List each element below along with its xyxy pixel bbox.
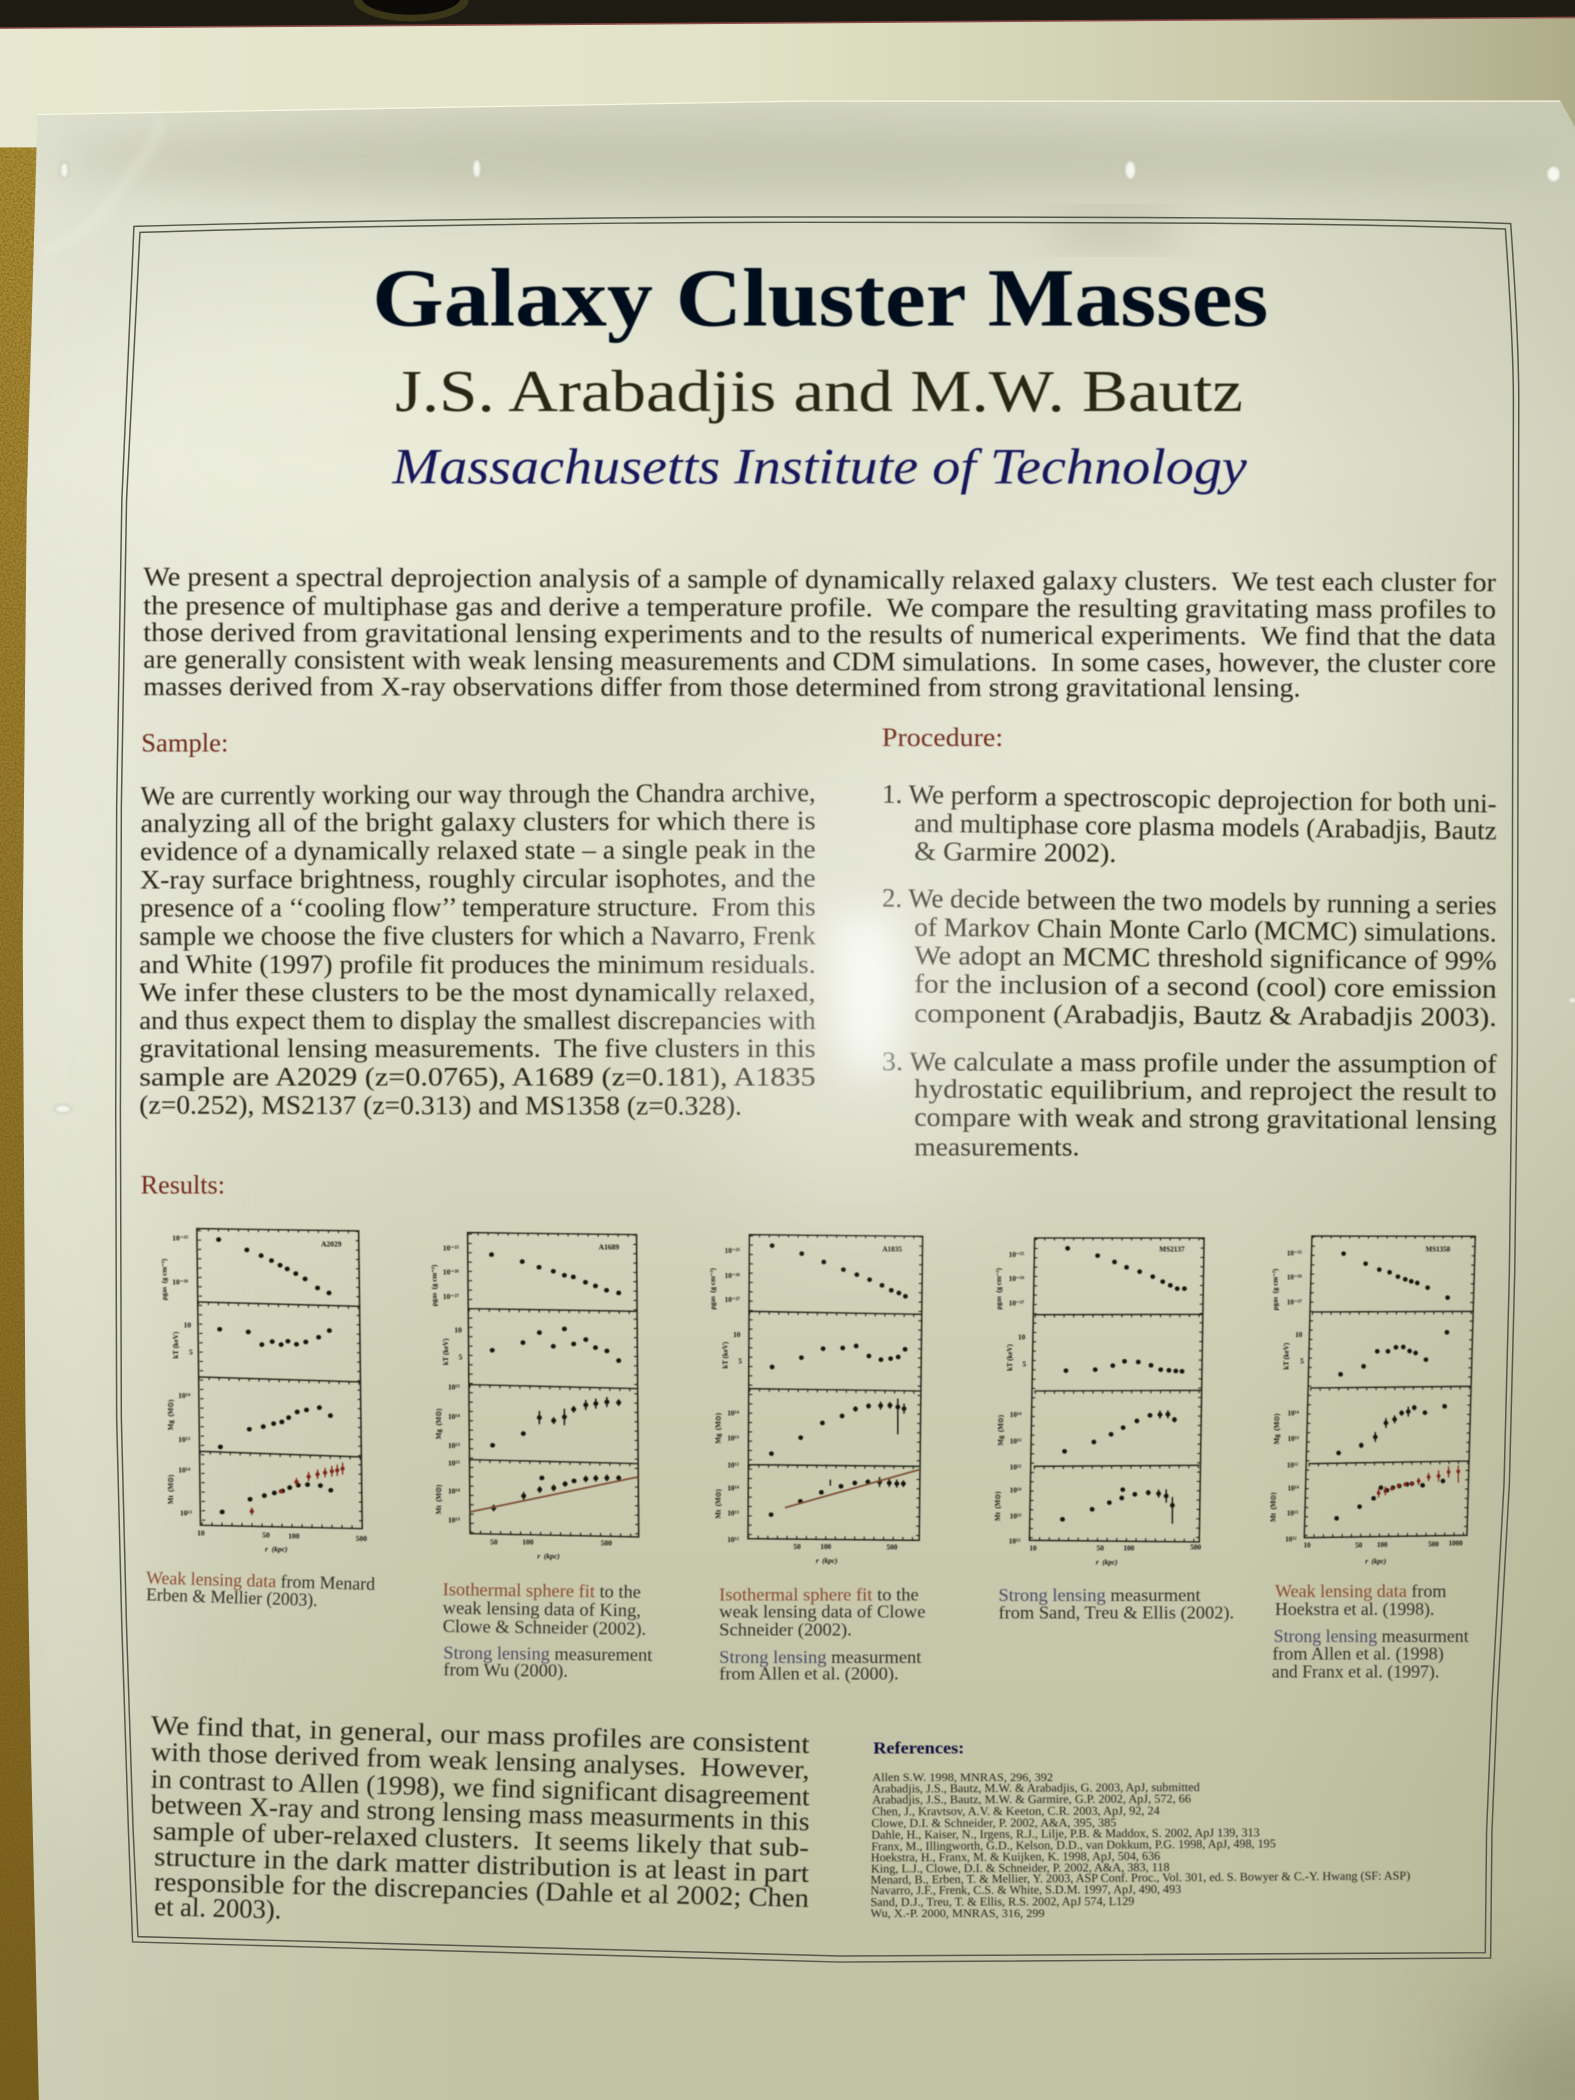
chart: MS2137: Mg (M⊙)	[997, 1414, 1005, 1446]
chart: A1835: A1835	[882, 1246, 902, 1254]
panel: sample text: sample are A2029 (z=0.0765), A1689 (z=0.181), A1835	[139, 1061, 816, 1091]
panel: procedure list: compare with weak and strong gravitational lensing	[914, 1102, 1497, 1135]
double-rule poster frame	[116, 217, 1519, 1962]
caption: MS1358: from Allen et al. (1998)	[1272, 1643, 1444, 1664]
chart: MS2137	[994, 1238, 1204, 1566]
chart: MS1358: 100	[1377, 1541, 1388, 1549]
panel: sample text: X-ray surface brightness, roughly circular isophotes, and the	[140, 863, 816, 894]
chart: A1835: kT (keV)	[721, 1341, 729, 1369]
chart: A2029: kT (keV)	[172, 1331, 180, 1359]
panel: conclusion text: structure in the dark matter distribution is at least in part	[154, 1841, 810, 1888]
chart: A1689: A1689	[599, 1244, 619, 1252]
chart: A1835: 50	[793, 1543, 801, 1551]
chart: MS2137: 10¹²	[1010, 1464, 1021, 1472]
caption: MS1358: Weak lensing data from	[1275, 1581, 1446, 1601]
panel: sample text: and thus expect them to display the smallest discrepancies with	[139, 1005, 816, 1035]
chart: A1689: Mt (M⊙)	[435, 1484, 443, 1514]
chart: MS2137: 10⁻²⁶	[1009, 1275, 1024, 1283]
panel: procedure list: component (Arabadjis, Bautz & Arabadjis 2003).	[914, 998, 1497, 1032]
panel: references list: Menard, B., Erben, T. & Mellier, Y. 2003, ASP Conf. Proc., Vol. 301, ed. S. Bowyer & C.-Y. Hwang (SF: ASP)	[870, 1868, 1410, 1887]
panel: procedure list: hydrostatic equilibrium, and reproject the result to	[914, 1074, 1497, 1107]
chart: A2029: 10⁻²⁵	[172, 1234, 189, 1242]
chart: MS2137: kT (keV)	[1006, 1343, 1014, 1371]
panel: conclusion text: in contrast to Allen (1998), we find significant disagreement	[151, 1764, 811, 1811]
chart: MS2137: 10	[1029, 1544, 1037, 1552]
chart: A1835: 10¹²	[727, 1536, 739, 1544]
chart: MS1358: 10⁻²⁶	[1287, 1274, 1302, 1282]
panel: references list: Franx, M., Illingworth, G.D., Kelson, D.D., van Dokkum, P.G. 1998, ApJ, 498, 195	[871, 1836, 1276, 1853]
chart: A1689: 10⁻²⁶	[443, 1269, 460, 1277]
chart: A2029: 10	[184, 1322, 192, 1330]
panel: conclusion text	[150, 1710, 811, 1925]
panel: references list: Wu, X.-P. 2000, MNRAS, 316, 299	[871, 1906, 1045, 1920]
chart: MS1358: 10¹⁴	[1288, 1409, 1300, 1417]
panel: procedure list: 1. We perform a spectroscopic deprojection for both uni-	[882, 779, 1497, 819]
chart: A1835: 500	[886, 1544, 898, 1552]
abstract paragraph: We present a spectral deprojection analysis of a sample of dynamically relaxed galaxy clusters. We test each cluster for	[143, 561, 1496, 597]
caption: A1689: from Wu (2000).	[443, 1659, 568, 1682]
abstract paragraph: the presence of multiphase gas and derive a temperature profile. We compare the resulting gravitating mass profiles to	[143, 590, 1496, 624]
chart: A1835: 10	[733, 1331, 741, 1339]
chart: A1689: 50	[490, 1538, 498, 1546]
panel: references list: Sand, D.J., Treu, T. & Ellis, R.S. 2002, ApJ 574, L129	[870, 1894, 1134, 1909]
chart: MS2137: 10¹⁴	[1010, 1486, 1022, 1494]
abstract paragraph: those derived from gravitational lensing experiments and to the results of numerical experiments. We find that the data	[143, 617, 1496, 651]
chart: A1689: 10⁻²⁵	[443, 1244, 460, 1252]
caption: MS1358: Strong lensing measurment	[1274, 1626, 1469, 1646]
panel: references list: Allen S.W. 1998, MNRAS, 296, 392	[872, 1770, 1053, 1784]
chart: MS1358: 50	[1355, 1542, 1363, 1550]
chart: A2029: 500	[356, 1535, 367, 1543]
panel: references list: King, L.J., Clowe, D.I. & Schneider, P. 2002, A&A, 383, 118	[871, 1860, 1170, 1876]
chart: A1689: 10¹³	[448, 1442, 461, 1450]
chart: A2029: A2029	[321, 1240, 342, 1248]
chart: MS1358: MS1358	[1426, 1245, 1451, 1253]
chart: A1689: kT (keV)	[442, 1338, 450, 1365]
caption: MS2137	[998, 1585, 1234, 1624]
panel: conclusion text: sample of uber-relaxed clusters. It seems likely that sub-	[153, 1815, 809, 1862]
dark ceiling strip	[0, 0, 1575, 28]
chart: A2029: 5	[189, 1348, 193, 1356]
panel: procedure list: for the inclusion of a second (cool) core emission	[914, 968, 1497, 1004]
panel: references list: Navarro, J.F., Frenk, C.S. & White, S.D.M. 1997, ApJ, 490, 493	[870, 1882, 1181, 1897]
chart: A1835: r (kpc)	[816, 1557, 838, 1565]
chart: A2029: r (kpc)	[265, 1546, 288, 1554]
chart: A1835: 10⁻²⁶	[725, 1272, 740, 1280]
chart: A1689: r (kpc)	[537, 1553, 560, 1561]
panel: sample text: analyzing all of the bright galaxy clusters for which there is	[141, 805, 816, 838]
panel: conclusion text: We find that, in general, our mass profiles are consistent	[150, 1710, 811, 1759]
caption: A1689: Isothermal sphere fit to the	[443, 1579, 641, 1602]
chart: MS2137: Mt (M⊙)	[994, 1491, 1002, 1521]
panel: sample text: evidence of a dynamically relaxed state – a single peak in the	[140, 834, 816, 866]
panel: conclusion text: et al. 2003).	[154, 1891, 282, 1925]
chart: A1689: 10¹⁴	[448, 1488, 461, 1496]
caption: A1835: Isothermal sphere fit to the	[719, 1584, 919, 1604]
chart: A1835: 10¹³	[727, 1510, 739, 1518]
caption: A2029	[146, 1568, 375, 1611]
caption: A2029: Weak lensing data from Menard	[146, 1568, 375, 1594]
caption: A1689: weak lensing data of King,	[443, 1598, 641, 1620]
heading: References: References:	[873, 1739, 964, 1758]
panel: conclusion text: responsible for the discrepancies (Dahle et al 2002; Chen	[154, 1866, 809, 1913]
caption: A1835: weak lensing data of Clowe	[719, 1602, 925, 1622]
caption: A1835: Schneider (2002).	[719, 1619, 852, 1640]
chart: MS2137: 10⁻²⁷	[1009, 1300, 1024, 1308]
panel: sample text: presence of a ‘‘cooling flow’’ temperature structure. From this	[140, 891, 816, 923]
abstract paragraph: masses derived from X-ray observations differ from those determined from strong gravitational lensing.	[143, 671, 1300, 703]
chart: MS2137: 10⁻²⁵	[1009, 1251, 1024, 1259]
chart: A1835: 10¹⁴	[727, 1409, 740, 1417]
panel: sample text: We infer these clusters to be the most dynamically relaxed,	[139, 977, 816, 1007]
chart: A1835: 10⁻²⁷	[725, 1296, 740, 1304]
panel: sample text	[139, 777, 816, 1121]
heading: Sample: Sample:	[141, 727, 228, 757]
chart: MS2137: 10	[1018, 1333, 1026, 1341]
chart: A1835: 10¹³	[727, 1434, 739, 1442]
chart: A2029: 10¹⁴	[178, 1392, 191, 1400]
chart: MS1358: 10¹³	[1288, 1435, 1299, 1443]
chart: A1689: ρgas (g cm⁻³)	[430, 1264, 439, 1306]
chart: MS1358: 10⁻²⁷	[1287, 1298, 1302, 1306]
chart: A1689: 10¹³	[448, 1516, 461, 1524]
chart: MS2137: 10¹³	[1010, 1438, 1021, 1446]
panel: procedure list: measurements.	[914, 1131, 1079, 1161]
heading: Results: Results:	[141, 1169, 225, 1199]
chart: A2029: 10¹⁴	[178, 1467, 191, 1475]
panel: procedure list: and multiphase core plasma models (Arabadjis, Bautz	[914, 808, 1497, 845]
chart: A1835: 10¹⁴	[727, 1484, 740, 1492]
chart: MS1358: 10¹²	[1287, 1462, 1298, 1470]
caption: A1689: Clowe & Schneider (2002).	[443, 1616, 646, 1640]
chart: MS1358: r (kpc)	[1365, 1558, 1386, 1566]
panel: references list: Arabadjis, J.S., Bautz, M.W. & Garmire, G.P. 2002, ApJ, 572, 66	[872, 1792, 1191, 1807]
panel: sample text: gravitational lensing measurements. The five clusters in this	[139, 1033, 816, 1063]
chart: A2029: ρgas (g cm⁻³)	[160, 1258, 169, 1300]
panel: procedure list: of Markov Chain Monte Carlo (MCMC) simulations.	[914, 912, 1497, 948]
chart: MS1358: 500	[1428, 1541, 1439, 1549]
chart: A1835	[709, 1235, 923, 1565]
panel: references list: Arabadjis, J.S., Bautz, M.W. & Arabadjis, G. 2003, ApJ, submitted	[872, 1780, 1200, 1796]
panel: references list: Clowe, D.I. & Schneider, P. 2002, A&A, 395, 385	[871, 1815, 1116, 1830]
chart: MS1358: Mt (M⊙)	[1270, 1492, 1278, 1522]
chart: MS1358: 5	[1300, 1358, 1304, 1366]
panel: references list: Hoekstra, H., Franx, M. & Kuijken, K. 1998, ApJ, 504, 636	[871, 1849, 1160, 1864]
chart: A2029: Mg (M⊙)	[167, 1399, 175, 1430]
panel: procedure list: We adopt an MCMC threshold significance of 99%	[914, 940, 1497, 976]
chart: A1835: 10¹²	[727, 1462, 739, 1470]
camera flash glare	[683, 770, 1031, 1225]
caption: A1835	[719, 1584, 925, 1685]
chart: A1835: Mg (M⊙)	[714, 1412, 722, 1444]
chart: A1689: 5	[459, 1354, 463, 1362]
panel: sample text: sample we choose the five clusters for which a Navarro, Frenk	[139, 920, 816, 951]
caption: MS1358	[1272, 1581, 1469, 1683]
title: Galaxy Cluster Masses	[372, 251, 1268, 343]
panel: references list: Dahle, H., Kaiser, N., Irgens, R.J., Lilje, P.B. & Maddox, S. 2002, ApJ 139, 313	[871, 1825, 1260, 1842]
chart: MS2137: 10¹⁴	[1010, 1411, 1022, 1419]
chart: MS2137: 500	[1190, 1544, 1202, 1552]
chart: MS1358: 1000	[1449, 1539, 1463, 1547]
chart: MS2137: 100	[1123, 1544, 1135, 1552]
chart: MS2137: MS2137	[1159, 1246, 1185, 1254]
panel: conclusion text: with those derived from weak lensing analyses. However,	[151, 1736, 810, 1785]
chart: MS1358: 10	[1304, 1542, 1311, 1550]
caption: MS1358: and Franx et al. (1997).	[1272, 1662, 1439, 1683]
chart: A2029: 50	[262, 1532, 270, 1540]
wall strip above poster	[0, 17, 1575, 214]
caption: A2029: Erben & Mellier (2003).	[146, 1584, 318, 1611]
caption: A1835: Strong lensing measurment	[719, 1647, 921, 1667]
chart: MS2137: 10¹³	[1010, 1513, 1021, 1521]
chart: A2029: 10¹³	[178, 1436, 191, 1444]
chart: MS2137: 50	[1097, 1544, 1104, 1552]
chart: A2029: 10⁻²⁶	[172, 1278, 189, 1286]
chart: A1835: 5	[738, 1358, 742, 1366]
chart: A1689: 10¹⁵	[448, 1384, 461, 1392]
chart: A1835: Mt (M⊙)	[714, 1488, 722, 1519]
chart: A2029: Mt (M⊙)	[167, 1474, 175, 1504]
panel: procedure list: & Garmire 2002).	[914, 836, 1117, 868]
chart: A1689: 10	[454, 1327, 462, 1335]
panel: sample text: We are currently working our way through the Chandra archive,	[140, 777, 816, 811]
chart: MS1358	[1270, 1236, 1475, 1566]
chart: MS1358: ρgas (g cm⁻³)	[1272, 1268, 1280, 1310]
caption: A1835: from Allen et al. (2000).	[719, 1664, 899, 1685]
authors: J.S. Arabadjis and M.W. Bautz	[395, 358, 1243, 424]
caption: MS2137: Strong lensing measurment	[998, 1585, 1201, 1605]
chart: MS1358: kT (keV)	[1283, 1342, 1291, 1370]
panel: procedure list: 3. We calculate a mass profile under the assumption of	[882, 1046, 1497, 1079]
chart: A1689	[430, 1233, 639, 1561]
panel: sample text: (z=0.252), MS2137 (z=0.313) and MS1358 (z=0.328).	[139, 1090, 742, 1121]
chart: A1835: ρgas (g cm⁻³)	[709, 1267, 717, 1310]
chart: A1689: 10¹⁴	[448, 1413, 461, 1421]
chart: MS1358: 10	[1295, 1331, 1303, 1339]
chart: MS2137: ρgas (g cm⁻³)	[995, 1267, 1003, 1310]
chart: A1835: 10⁻²⁵	[725, 1247, 740, 1255]
chart: MS1358: 10¹⁴	[1288, 1484, 1300, 1492]
panel: procedure list: 2. We decide between the two models by running a series	[882, 883, 1497, 920]
chart: A1835: 100	[820, 1543, 832, 1551]
chart: A2029: 10	[197, 1529, 205, 1537]
chart: MS2137: 10¹²	[1009, 1538, 1020, 1546]
chart: MS2137: 5	[1023, 1360, 1027, 1368]
panel: conclusion text: between X-ray and strong lensing mass measurments in this	[151, 1789, 810, 1836]
chart: A2029: 10¹³	[180, 1509, 193, 1517]
heading: Procedure: Procedure:	[882, 722, 1003, 752]
panel: sample text: and White (1997) profile fit produces the minimum residuals.	[139, 949, 816, 979]
chart: A2029: 100	[288, 1533, 300, 1541]
icon: poster pins	[55, 159, 1575, 1113]
abstract paragraph: are generally consistent with weak lensing measurements and CDM simulations. In some cases, however, the cluster core	[143, 644, 1496, 678]
chart: A2029	[160, 1229, 367, 1554]
chart: A1689: 100	[522, 1539, 534, 1547]
chart: A1689: 500	[601, 1540, 612, 1548]
institution: Massachusetts Institute of Technology	[391, 439, 1247, 495]
caption: MS1358: Hoekstra et al. (1998).	[1275, 1599, 1434, 1620]
chart: MS1358: 10⁻²⁵	[1287, 1249, 1302, 1257]
panel: procedure list	[882, 779, 1497, 1161]
caption: A1689: Strong lensing measurement	[443, 1643, 652, 1665]
chart: MS1358: Mg (M⊙)	[1273, 1413, 1281, 1444]
panel: references list: Chen, J., Kravtsov, A.V. & Keeton, C.R. 2003, ApJ, 92, 24	[872, 1804, 1160, 1818]
chart: MS1358: 10¹²	[1285, 1535, 1296, 1543]
caption: MS2137: from Sand, Treu & Ellis (2002).	[998, 1603, 1234, 1624]
caption: A1689	[443, 1579, 652, 1682]
chart: A1689: 10¹⁵	[448, 1459, 461, 1467]
chart: MS2137: r (kpc)	[1096, 1558, 1118, 1566]
chart: A1689: 10⁻²⁷	[443, 1293, 460, 1301]
chart: MS1358: 10¹³	[1287, 1509, 1298, 1517]
panel: references list	[870, 1770, 1410, 1920]
chart: A1689: Mg (M⊙)	[435, 1408, 443, 1439]
abstract paragraph	[143, 561, 1496, 703]
